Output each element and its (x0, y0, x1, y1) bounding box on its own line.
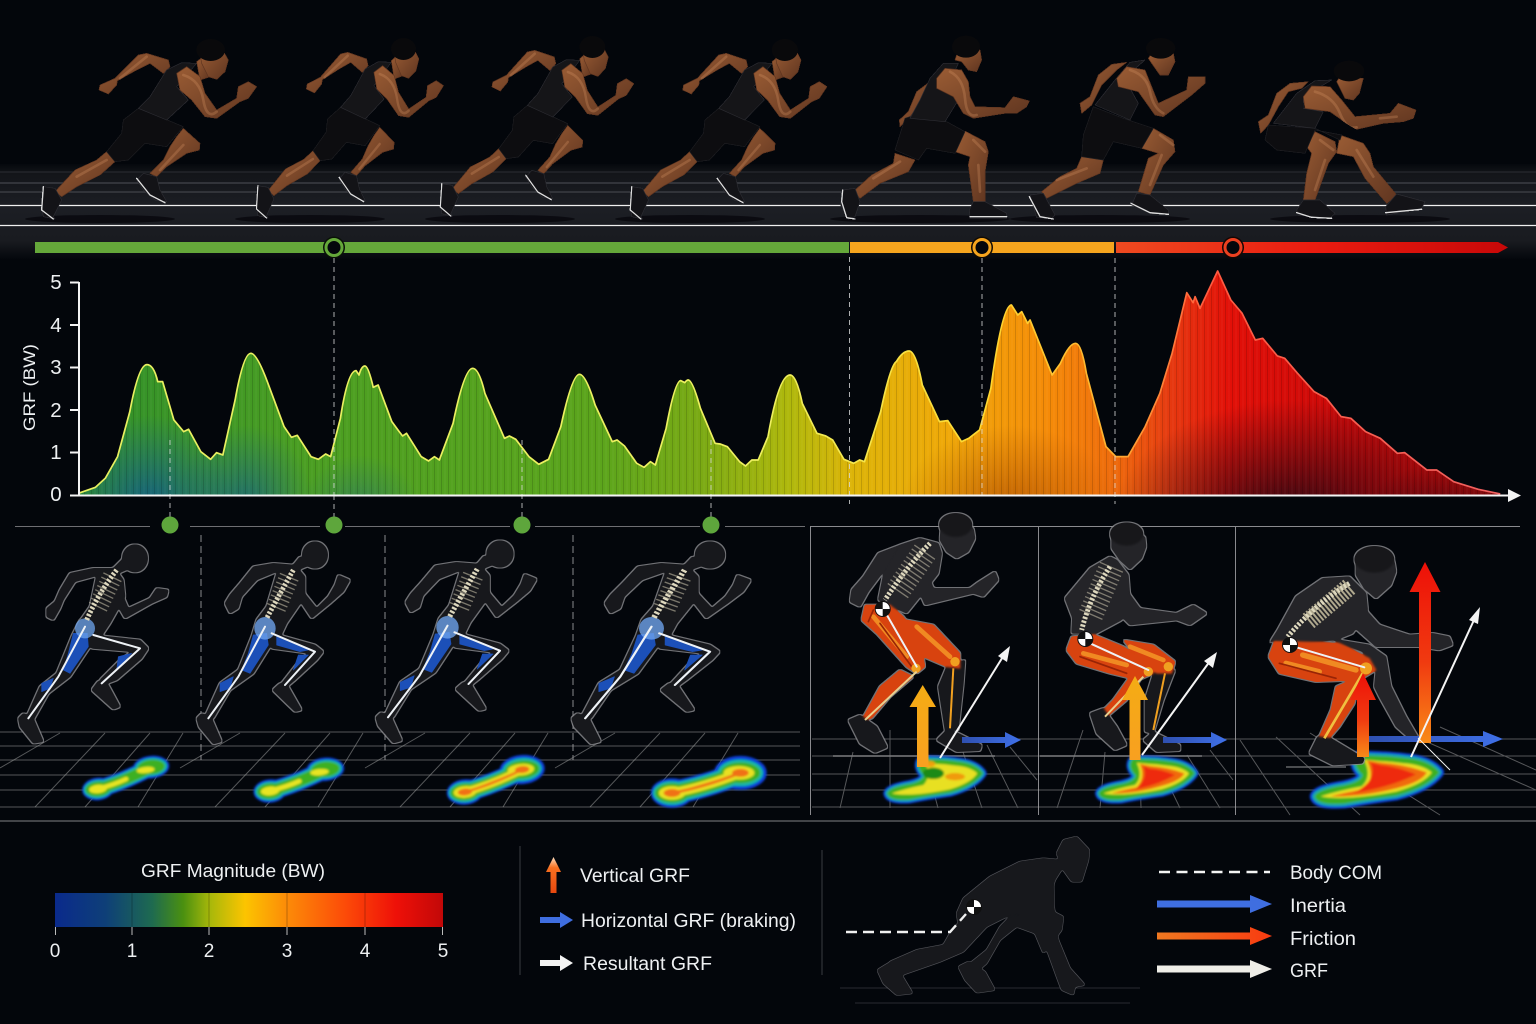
legend: GRF magnitude colour scale: 2 (204, 941, 214, 962)
pressure floor grid: left panels (0, 732, 800, 807)
legend: GRF magnitude colour scale: 3 (282, 941, 292, 962)
runner 4 (630, 39, 827, 219)
skeleton figure 2 (197, 542, 350, 744)
runner sequence (42, 36, 1425, 219)
pressure floor grid: right panels (812, 727, 1536, 815)
legend: resultant GRF: Resultant GRF (583, 954, 712, 975)
muscle figure 7 (1269, 546, 1453, 765)
muscle figure 5 (848, 513, 998, 753)
muscle figure 6 (1065, 522, 1207, 752)
legend: body COM: Body COM (1290, 862, 1382, 884)
divider (821, 850, 823, 975)
runner 3 (440, 36, 634, 216)
legend: horizontal GRF: Horizontal GRF (braking) (581, 911, 796, 932)
y axis: 4 (50, 314, 62, 337)
green event markers (162, 516, 720, 534)
running track (0, 164, 1536, 260)
x axis arrow (70, 489, 1521, 502)
legend: friction (1157, 927, 1356, 950)
y axis: 1 (50, 441, 62, 464)
legend: vertical GRF (546, 857, 690, 893)
GRF area chart (23, 257, 1521, 516)
footprint 7 (1316, 756, 1438, 803)
legend: vertical GRF: Vertical GRF (580, 866, 690, 887)
y axis: 5 (50, 271, 62, 294)
legend: GRF magnitude colour scale: 4 (360, 941, 371, 962)
legend: GRF (1157, 960, 1328, 982)
chart area fill (80, 273, 1500, 494)
footprint 1 (80, 754, 172, 802)
runner 1 (42, 39, 257, 219)
legend: inertia: Inertia (1290, 895, 1346, 917)
phase marker: red (1222, 236, 1244, 258)
force arrows, figure 5 (910, 646, 1021, 767)
legend: GRF: GRF (1290, 960, 1328, 982)
divider (519, 846, 521, 975)
phase marker: orange (971, 236, 993, 258)
y axis (50, 271, 79, 506)
legend: GRF magnitude colour scale: 0 (50, 941, 60, 962)
y axis: 0 (50, 483, 62, 506)
force arrows, figure 7 (1350, 562, 1503, 770)
legend: GRF magnitude colour scale: GRF Magnitude (BW) (141, 860, 325, 881)
legend: GRF magnitude colour scale: 5 (438, 941, 448, 962)
legend: GRF magnitude colour scale: 1 (127, 941, 137, 962)
skeleton figure 1 (18, 545, 168, 743)
legend: GRF magnitude colour scale (50, 860, 448, 962)
y axis: 2 (50, 399, 62, 422)
y axis title: GRF (BW) (20, 344, 39, 431)
skeleton figure 4 (572, 542, 751, 744)
panel frame lines (0, 526, 1536, 821)
force arrows, figure 6 (1122, 652, 1227, 760)
runner 5 (841, 36, 1029, 219)
legend: friction: Friction (1290, 928, 1356, 950)
runner 2 (256, 38, 443, 218)
runner 7 (1258, 61, 1425, 218)
pressure footprints (80, 753, 1438, 807)
footprint 3 (444, 753, 547, 806)
phase marker: green (323, 236, 345, 258)
footprint 2 (251, 756, 346, 804)
legend: inertia (1157, 895, 1346, 917)
footprint 5 (888, 760, 982, 799)
crouched COM figure (840, 837, 1140, 1003)
phase dashed guides (170, 257, 1115, 518)
runner 6 (1029, 38, 1205, 219)
skeleton figure 3 (376, 541, 537, 743)
chart outline (78, 271, 1500, 494)
footprint 6 (1100, 760, 1193, 799)
phase progress bar (35, 236, 1508, 258)
y axis: 3 (50, 356, 62, 379)
footprint 4 (651, 756, 766, 807)
